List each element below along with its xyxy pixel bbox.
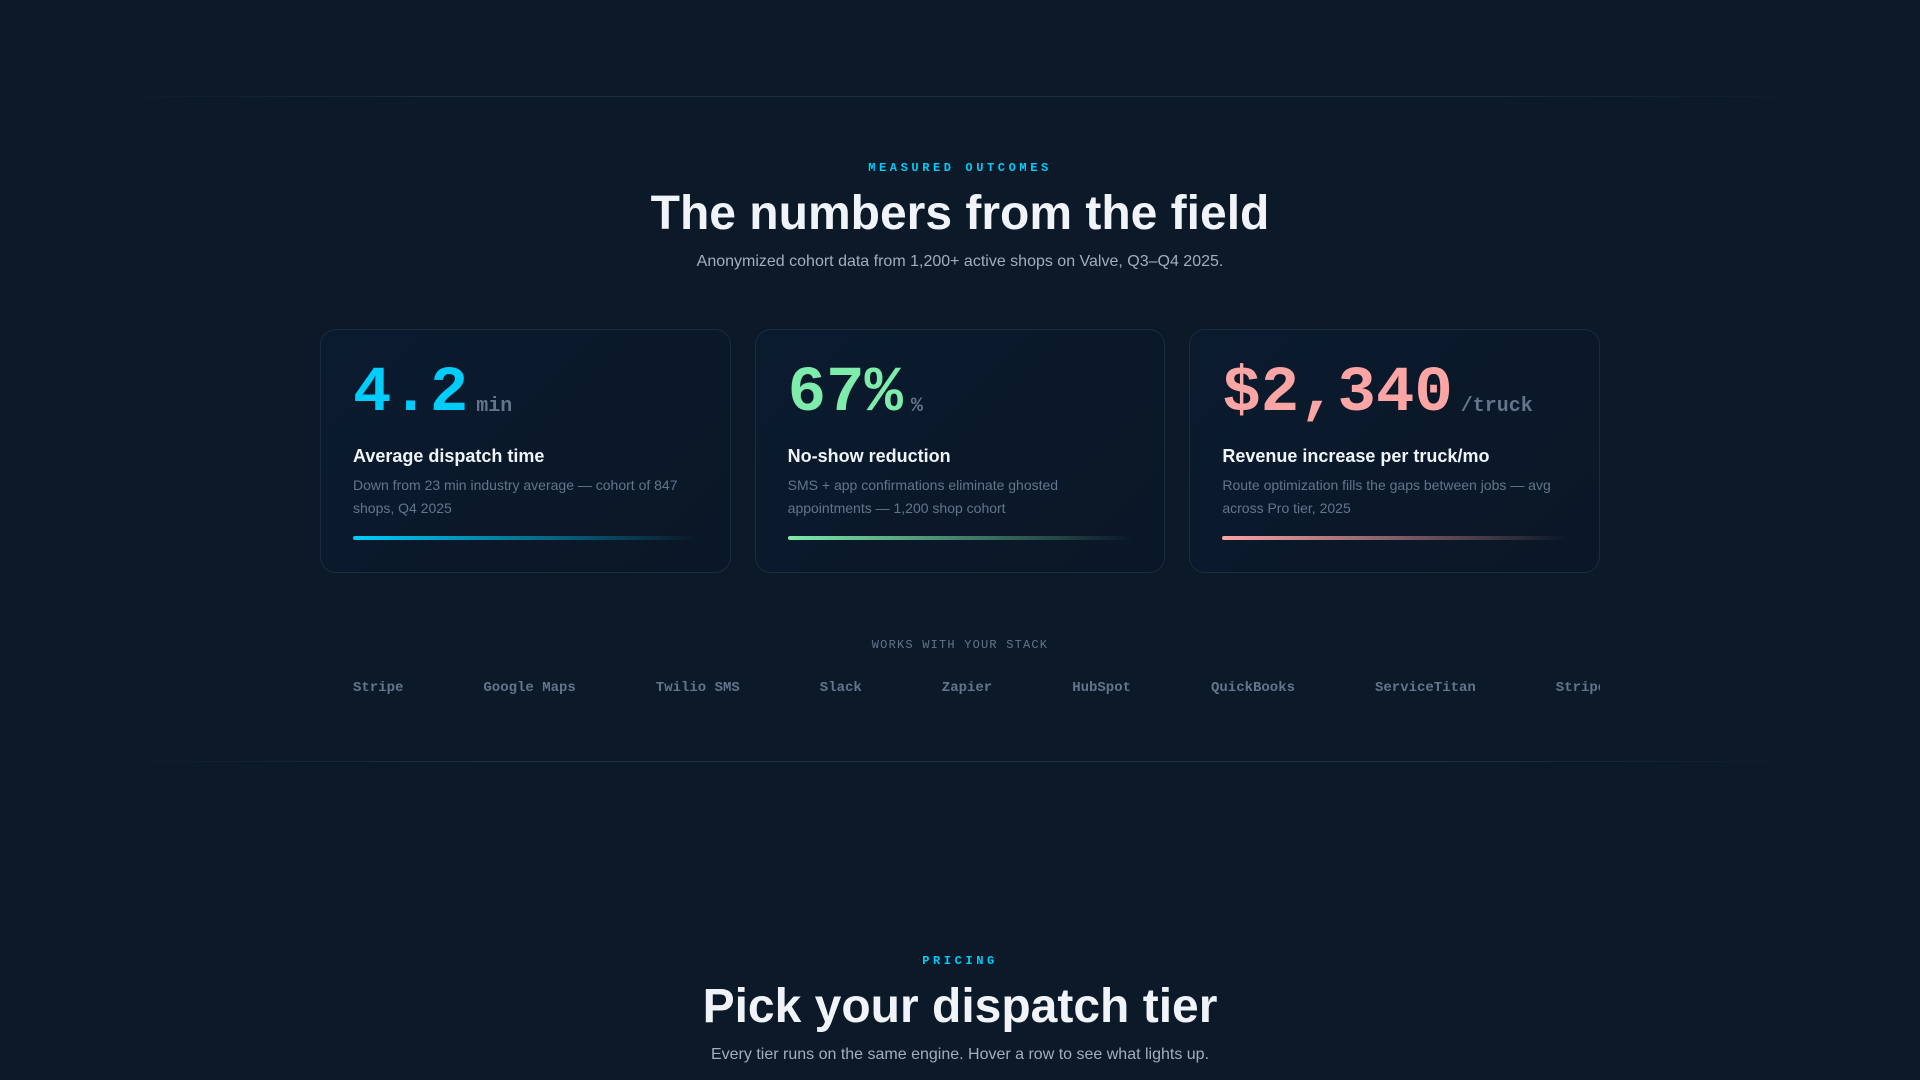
card title: No-show reduction bbox=[788, 446, 951, 466]
subheading: tier engine: Every tier runs on the same engine. Hover a row to see what lights up. bbox=[711, 1046, 1209, 1063]
eyebrow: measured outcomes: MEASURED OUTCOMES bbox=[868, 161, 1052, 175]
card description: Down from 23 min industry average — cohort of 847 shops, Q4 2025 bbox=[353, 477, 678, 516]
integrations logo row: Google Maps bbox=[483, 680, 576, 696]
card title: Average dispatch time bbox=[353, 446, 544, 466]
card description: Route optimization fills the gaps between jobs — avg across Pro tier, 2025 bbox=[1222, 477, 1551, 516]
accent bar: cyan bbox=[353, 536, 698, 540]
integrations logo row: Stripe bbox=[353, 680, 403, 696]
metric: 4.2 min: 4.2 min bbox=[353, 358, 512, 430]
card title: Revenue increase per truck/mo bbox=[1222, 446, 1489, 466]
panel: average dispatch time card bbox=[320, 329, 731, 573]
eyebrow: pricing: PRICING bbox=[922, 954, 998, 968]
integrations logo row bbox=[353, 680, 1600, 696]
panel: no-show reduction card bbox=[755, 329, 1165, 573]
integrations logo row: Twilio SMS bbox=[656, 680, 740, 696]
heading: numbers from the field: The numbers from the field bbox=[651, 187, 1269, 240]
heading: pick your dispatch tier: Pick your dispatch tier bbox=[703, 980, 1217, 1033]
integrations logo row: Zapier bbox=[942, 680, 992, 696]
subheading: cohort data: Anonymized cohort data from 1,200+ active shops on Valve, Q3–Q4 2025. bbox=[697, 253, 1223, 270]
card description: SMS + app confirmations eliminate ghosted appointments — 1,200 shop cohort bbox=[788, 477, 1058, 516]
panel: revenue increase card bbox=[1189, 329, 1600, 573]
accent bar: coral bbox=[1222, 536, 1567, 540]
accent bar: green bbox=[788, 536, 1132, 540]
integrations logo row: QuickBooks bbox=[1211, 680, 1295, 696]
integrations logo row: Slack bbox=[820, 680, 862, 696]
integrations logo row: ServiceTitan bbox=[1375, 680, 1476, 696]
metric: 67%: 67% % bbox=[788, 358, 923, 430]
integrations logo row: HubSpot bbox=[1072, 680, 1131, 696]
integrations label: WORKS WITH YOUR STACK bbox=[872, 638, 1048, 652]
metric: $2,340 /truck: $2,340 /truck bbox=[1222, 358, 1533, 430]
